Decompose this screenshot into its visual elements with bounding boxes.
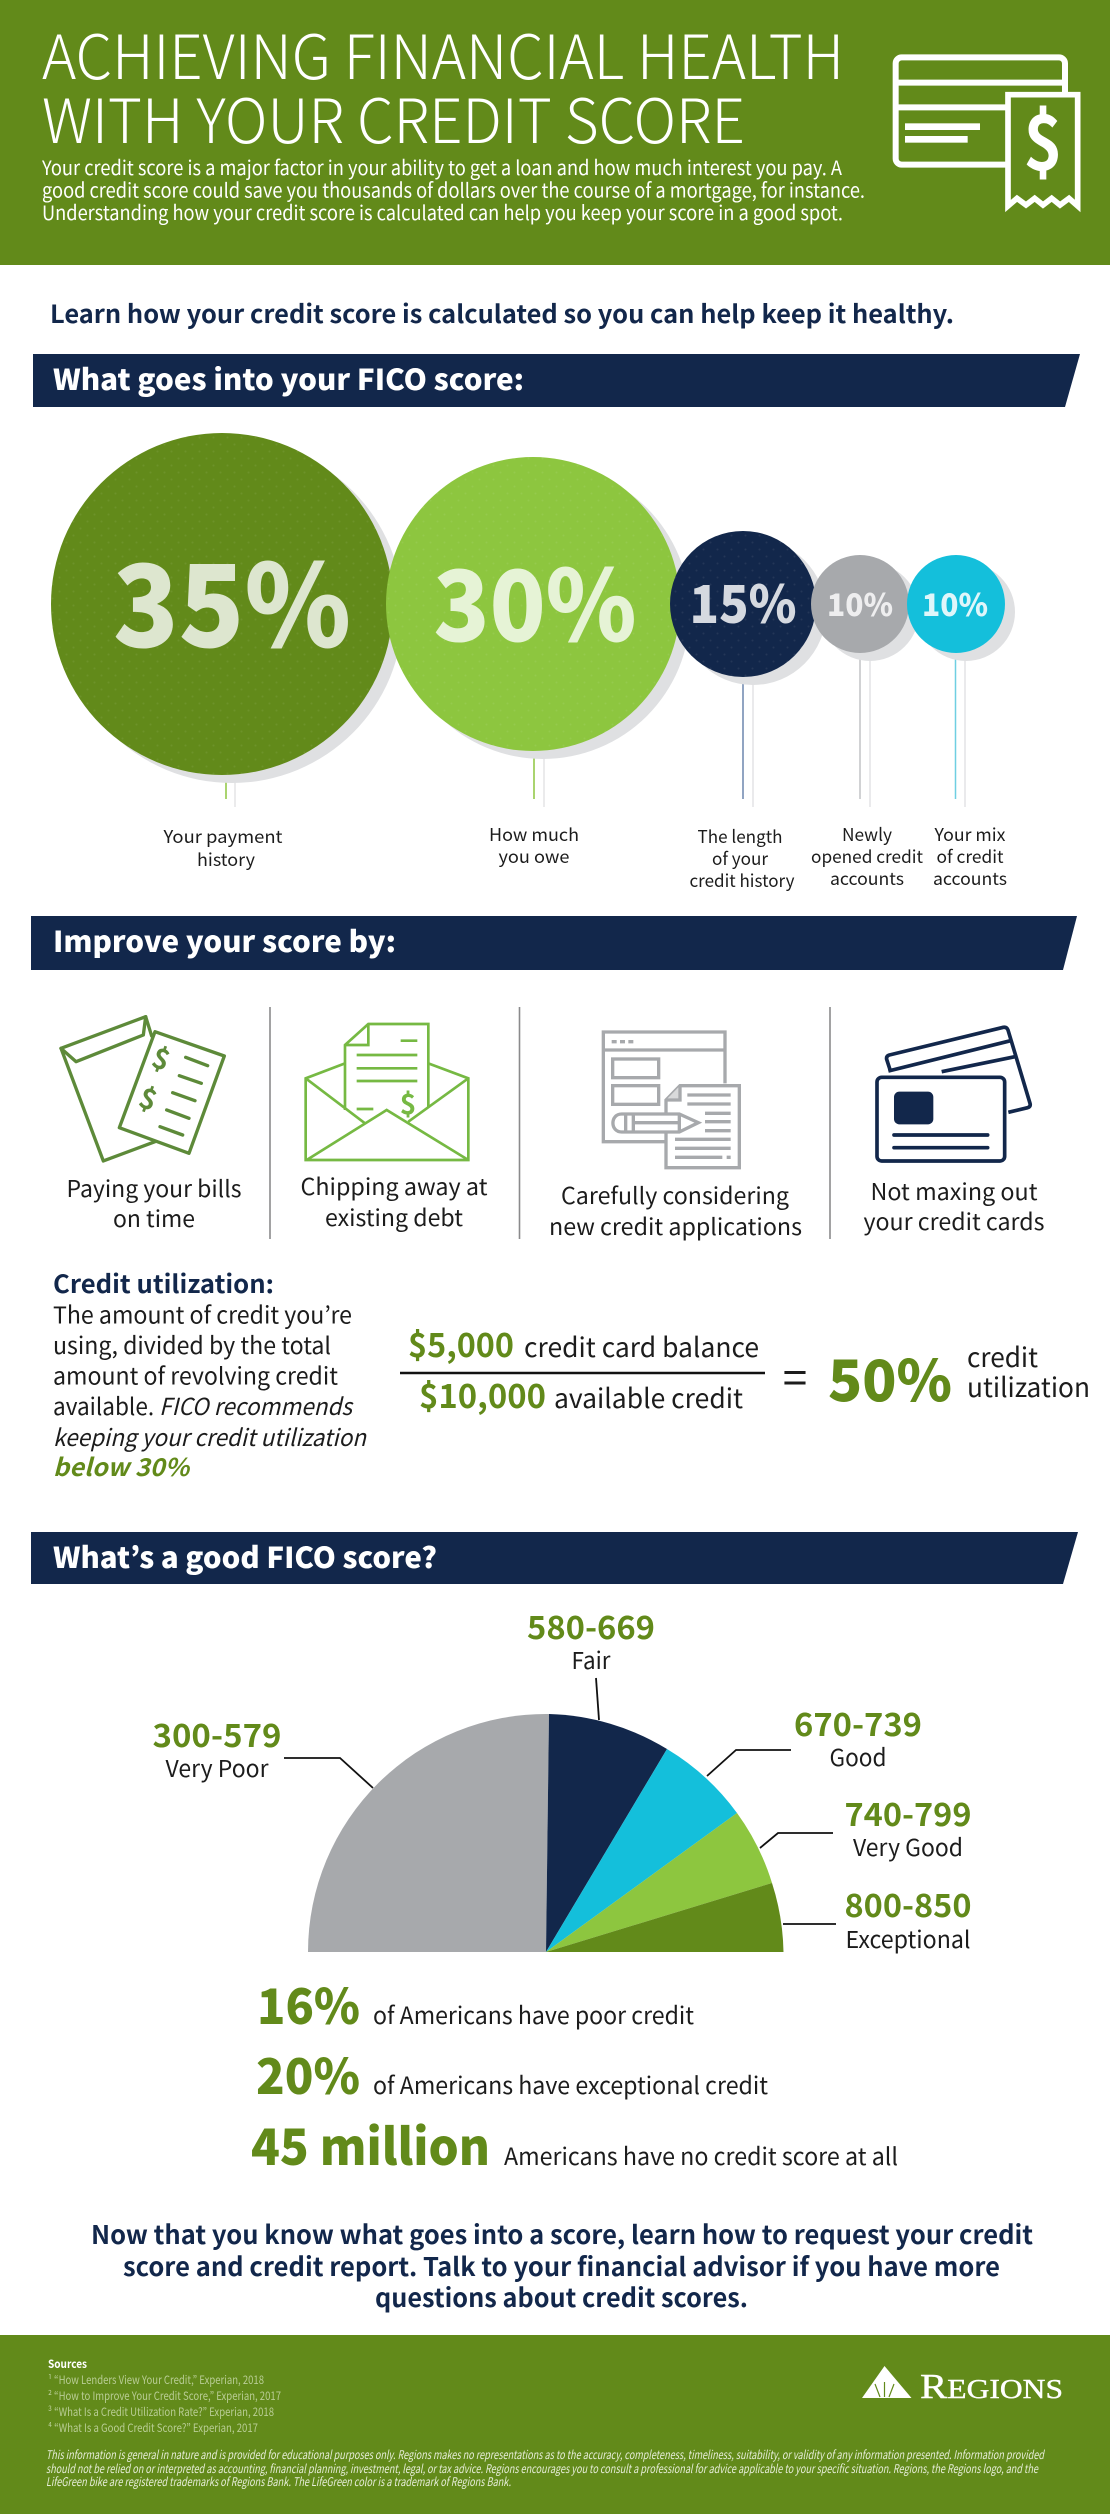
bubble labels: The length — [698, 824, 782, 849]
tip: chipping away at debt — [300, 1024, 488, 1233]
bubble: 15%: 15% — [690, 563, 796, 638]
banner: what goes into your FICO score: What goes into your FICO score: — [53, 357, 524, 399]
icon: envelope and bill: $ — [134, 1076, 163, 1120]
bubble: 15% — [670, 531, 826, 807]
icon: open envelope with bill: $ — [400, 1083, 416, 1123]
tip text: Not maxing out — [870, 1173, 1038, 1207]
bubble labels: history — [197, 847, 255, 872]
sources: Sources — [48, 2356, 87, 2372]
tip text: on time — [113, 1200, 195, 1234]
bubble: 10% gray — [811, 555, 919, 807]
tip text — [864, 1173, 1044, 1237]
range label: very good: Very Good — [853, 1829, 963, 1863]
range label: good: Good — [830, 1739, 886, 1773]
icon: credit card and receipt: $ — [1024, 82, 1062, 192]
bubble labels: How much — [489, 822, 579, 847]
tip: not maxing out credit cards — [864, 1027, 1044, 1237]
sources: ¹ “How Lenders View Your Credit,” Experian, 2018 — [48, 2372, 264, 2388]
banner: improve your score — [31, 916, 1077, 970]
stat: 45 million no score: Americans have no credit score at all — [504, 2137, 898, 2172]
range label: fair: 580-669 — [527, 1603, 655, 1649]
tip: considering new credit applications — [549, 1032, 802, 1242]
icon: credit card and receipt — [896, 57, 1078, 206]
bubble chart: FICO score components — [51, 433, 1015, 807]
range label: fair — [527, 1603, 655, 1676]
tip text: your credit cards — [864, 1203, 1044, 1237]
bubble labels: of your — [712, 846, 768, 871]
icon: application form and pencil — [603, 1032, 739, 1168]
sources: ⁴ “What Is a Good Credit Score?” Experian, 2017 — [48, 2420, 258, 2436]
credit utilization text block: The amount of credit you’re — [53, 1296, 352, 1330]
banner: improve your score: Improve your score by: — [53, 919, 396, 961]
bubble labels: Newly — [842, 822, 892, 847]
bubble: 35%: 35% — [113, 515, 351, 680]
tip text: new credit applications — [549, 1208, 802, 1242]
disclaimer: LifeGreen bike are registered trademarks of Regions Bank. The LifeGreen color is a trademark of Regions Bank. — [46, 2473, 511, 2490]
bubble labels: you owe — [498, 844, 570, 869]
bubble: 10% cyan: 10% — [922, 580, 988, 625]
closing call to action: score and credit report. Talk to your financial advisor if you have more — [123, 2247, 1000, 2284]
bubble: 10% cyan — [907, 555, 1015, 807]
tip text: existing debt — [325, 1199, 463, 1233]
range label: very poor: 300-579 — [152, 1711, 282, 1757]
tip text — [300, 1168, 488, 1233]
bubble: 30%: 30% — [434, 528, 636, 670]
banner: what's a good FICO score: What’s a good FICO score? — [53, 1535, 437, 1577]
bubble labels: Your payment — [162, 824, 283, 849]
title — [42, 8, 844, 161]
credit utilization formula: credit card balance — [524, 1326, 759, 1365]
logo: Regions — [862, 2366, 1063, 2406]
bubble labels: of credit — [936, 844, 1004, 869]
logo: Regions: REGIONS — [920, 2367, 1063, 2406]
credit utilization formula: credit — [967, 1336, 1038, 1375]
credit utilization formula — [400, 1319, 1090, 1418]
banner: what goes into your FICO score — [33, 354, 1080, 407]
closing call to action — [91, 2215, 1033, 2315]
stat: 16% poor credit: 16% — [257, 1968, 360, 2039]
bubble: 10% gray: 10% — [827, 580, 893, 625]
bubble labels — [162, 822, 1007, 893]
bubble: 30% — [386, 457, 690, 807]
semicircle chart: FICO score ranges — [308, 1714, 784, 1952]
icon: open envelope with bill — [306, 1024, 468, 1160]
bubble labels: accounts — [933, 866, 1007, 891]
intro paragraph: Understanding how your credit score is calculated can help you keep your score in a good spot. — [42, 197, 843, 226]
range label: very poor: Very Poor — [166, 1750, 269, 1784]
range label: very good — [844, 1790, 972, 1863]
stat: 20% exceptional credit: of Americans have exceptional credit — [373, 2066, 768, 2101]
stat: 16% poor credit — [257, 1968, 694, 2039]
stat: 16% poor credit: of Americans have poor credit — [373, 1996, 694, 2031]
range label: good: 670-739 — [794, 1700, 922, 1746]
credit utilization formula: $5,000 — [408, 1319, 514, 1367]
range label: exceptional — [844, 1881, 972, 1955]
bubble labels: credit history — [690, 868, 794, 893]
sources: ² “How to Improve Your Credit Score,” Experian, 2017 — [48, 2388, 281, 2404]
subheading: Learn how your credit score is calculated so you can help keep it healthy. — [50, 295, 954, 331]
footer panel — [0, 2335, 1110, 2514]
credit utilization formula: $10,000 — [419, 1370, 546, 1418]
tip: paying bills on time — [61, 1017, 242, 1234]
tip text — [549, 1177, 802, 1242]
stat: 45 million no score — [251, 2108, 898, 2180]
banner: what's a good FICO score — [31, 1532, 1078, 1584]
credit utilization text block: keeping your credit utilization — [53, 1419, 368, 1453]
range label: good — [794, 1700, 922, 1773]
bubble labels: Your mix — [933, 822, 1006, 847]
credit utilization formula: = — [783, 1343, 807, 1407]
bubble: 35% — [51, 433, 403, 807]
range label: exceptional: Exceptional — [846, 1921, 970, 1955]
stat: 20% exceptional credit — [256, 2038, 768, 2109]
icon: envelope and bill: $ — [147, 1036, 176, 1080]
title: WITH YOUR CREDIT SCORE — [42, 72, 745, 161]
stat: 20% exceptional credit: 20% — [256, 2038, 360, 2109]
title: ACHIEVING FINANCIAL HEALTH — [42, 8, 844, 97]
disclaimer — [46, 2446, 1045, 2490]
credit utilization text block: amount of revolving credit — [53, 1358, 338, 1392]
stat: 45 million no score: 45 million — [251, 2108, 490, 2180]
tip text: Paying your bills — [66, 1170, 242, 1204]
credit utilization formula: utilization — [967, 1366, 1090, 1405]
tip text: Carefully considering — [561, 1177, 789, 1211]
sources — [48, 2356, 281, 2436]
credit utilization text block: using, divided by the total — [53, 1327, 331, 1361]
credit utilization text block: Credit utilization: — [53, 1265, 274, 1301]
range label: fair: Fair — [572, 1642, 611, 1676]
tip text: Chipping away at — [300, 1168, 488, 1202]
sources: ³ “What Is a Credit Utilization Rate?” Experian, 2018 — [48, 2404, 274, 2420]
credit utilization text block: below 30% — [53, 1449, 191, 1484]
tip text — [66, 1170, 242, 1234]
bubble labels: accounts — [830, 866, 904, 891]
icon: credit cards — [877, 1027, 1030, 1161]
leader lines — [284, 1678, 836, 1924]
credit utilization formula: 50% — [828, 1336, 952, 1418]
range label: very poor — [152, 1711, 282, 1784]
bubble labels: opened credit — [811, 844, 923, 869]
credit utilization formula: available credit — [554, 1377, 743, 1416]
intro paragraph — [41, 152, 865, 226]
intro paragraph: Your credit score is a major factor in your ability to get a loan and how much interest you pay. A — [41, 152, 843, 181]
credit utilization text block: available. FICO recommends — [53, 1388, 354, 1422]
icon: envelope and bill — [61, 1017, 224, 1161]
closing call to action: Now that you know what goes into a score, learn how to request your credit — [91, 2215, 1033, 2252]
credit utilization text block — [53, 1265, 368, 1484]
range label: very good: 740-799 — [844, 1790, 972, 1836]
closing call to action: questions about credit scores. — [375, 2278, 748, 2315]
range label: exceptional: 800-850 — [844, 1881, 972, 1927]
intro paragraph: good credit score could save you thousands of dollars over the course of a mortgage, for instance. — [42, 174, 865, 204]
header panel — [0, 0, 1110, 265]
